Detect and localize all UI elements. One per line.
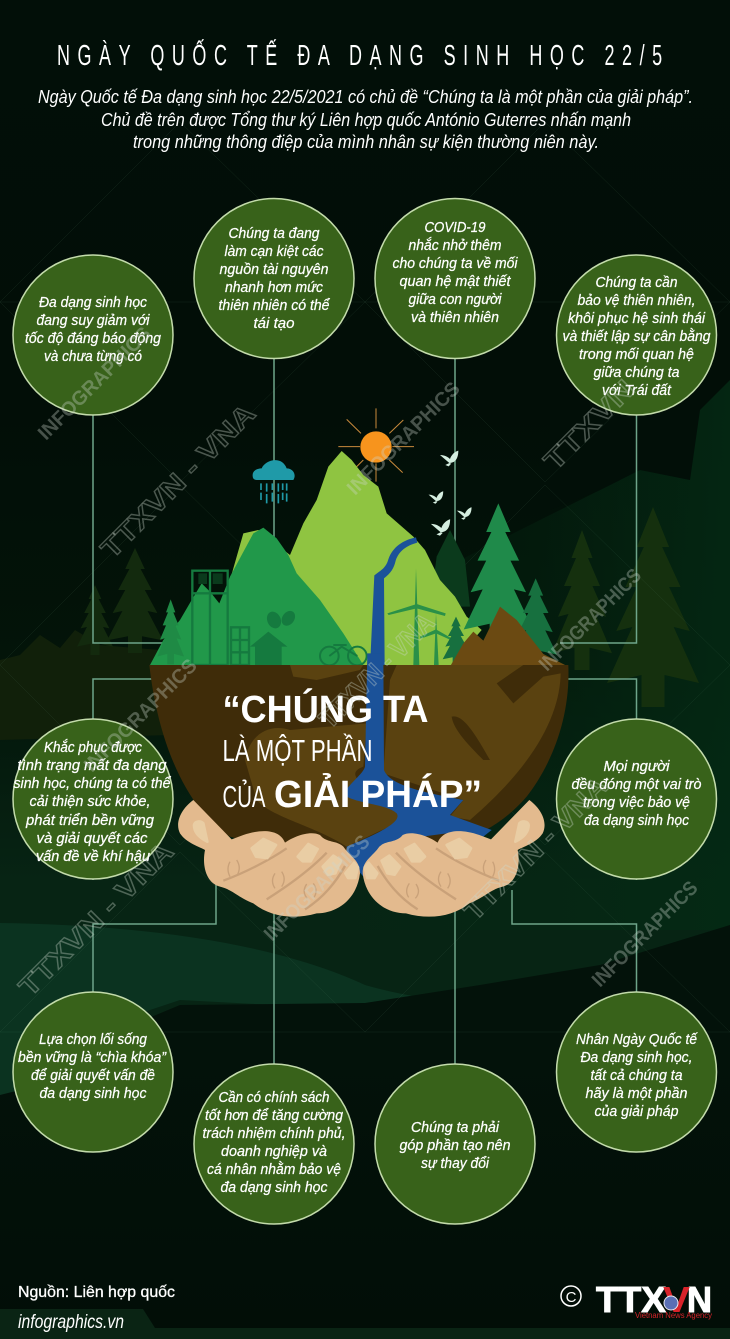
circle: thay đổi: [375, 1064, 535, 1224]
circle: tài nguyên: nhanh hơn mức: [225, 279, 323, 296]
circle: tài nguyên: làm cạn kiệt các: [224, 243, 324, 260]
icon: sun: [338, 408, 414, 482]
circle: COVID-19: nhắc nhở thêm: [408, 237, 502, 254]
distant trees: [430, 530, 470, 607]
connector lines: [93, 358, 636, 1064]
watermarks: TTXVN - VNA: [313, 607, 440, 734]
circle: khắc phục: Khắc phục được: [44, 739, 142, 756]
icon: wind turbines: [387, 568, 452, 665]
logo: TTXVN: TTX: [596, 1279, 666, 1320]
circle: bảo vệ thiên nhiên: với Trái đất: [602, 382, 672, 399]
circle: bảo vệ thiên nhiên: [556, 255, 716, 415]
circle: một phần của giải pháp: hãy là một phần: [586, 1085, 688, 1102]
watermarks: INFOGRAPHICS: [535, 565, 646, 676]
circle: khắc phục: [13, 719, 173, 879]
heading: GIẢI PHÁP”: [274, 772, 482, 816]
circle: khắc phục: sinh học, chúng ta có thể: [14, 775, 171, 792]
circle: COVID-19: giữa con người: [408, 291, 502, 308]
circle: COVID-19: quan hệ mật thiết: [400, 273, 511, 290]
circle: lối sống: [13, 992, 173, 1152]
circle: bảo vệ thiên nhiên: và thiết lập sự cân bằng: [562, 328, 711, 345]
circle: khắc phục: phát triển bền vững: [25, 812, 155, 829]
river: [343, 653, 492, 877]
circle: suy giảm: đang suy giảm với: [36, 312, 150, 329]
heading: [222, 687, 482, 816]
circle: suy giảm: và chưa từng có: [44, 348, 142, 365]
watermarks: INFOGRAPHICS: [34, 323, 156, 445]
circle: khắc phục: cải thiện sức khỏe,: [30, 793, 150, 810]
watermarks: TTXVN - VNA: [458, 771, 614, 926]
circle: mọi người: trong việc bảo vệ: [583, 794, 690, 811]
circle: khắc phục: và giải quyết các: [36, 830, 148, 847]
watermarks: TTXVN - VNA: [13, 836, 179, 1002]
circle: lối sống: bền vững là “chìa khóa”: [18, 1049, 167, 1066]
logo: TTXVN: [596, 1279, 712, 1320]
icon: rain cloud: [253, 460, 295, 503]
circle: lối sống: đa dạng sinh học: [40, 1085, 147, 1102]
circle: chính sách: đa dạng sinh học: [220, 1179, 328, 1196]
circle: mọi người: đều đóng một vai trò: [572, 776, 702, 793]
circle: suy giảm: tốc độ đáng báo động: [25, 330, 162, 347]
watermarks: INFOGRAPHICS: [260, 831, 375, 946]
watermarks: TTXVN: [538, 374, 641, 476]
brown mound: [450, 607, 568, 667]
central illustration: soil bowl and hands: [149, 653, 569, 917]
circle: một phần của giải pháp: Đa dạng sinh học,: [580, 1049, 692, 1066]
circle: COVID-19: [375, 198, 535, 358]
circle: tài nguyên: nguồn tài nguyên: [220, 261, 328, 278]
circle: thay đổi: Chúng ta phải: [411, 1119, 500, 1136]
small left tree: [157, 599, 184, 664]
circle: mọi người: Mọi người: [604, 758, 670, 775]
circle: bảo vệ thiên nhiên: giữa chúng ta: [594, 364, 680, 381]
buildings and house: [192, 571, 249, 667]
circle: mọi người: đa dạng sinh học: [584, 812, 689, 829]
circle: mọi người: [556, 719, 716, 879]
watermarks: INFOGRAPHICS: [343, 378, 465, 500]
circle: lối sống: để giải quyết vấn đề: [31, 1067, 155, 1084]
circle: một phần của giải pháp: của giải pháp: [594, 1103, 678, 1120]
circle: COVID-19: và thiên nhiên: [411, 309, 499, 326]
watermarks: TTXVN - VNA: [95, 398, 261, 564]
watermarks: INFOGRAPHICS: [588, 877, 703, 992]
circle: chính sách: [194, 1064, 354, 1224]
copyright symbol: C: [566, 1289, 577, 1306]
circle: khắc phục: vấn đề về khí hậu: [36, 848, 151, 865]
website: infographics.vn: [18, 1312, 124, 1333]
circle: COVID-19: COVID-19: [424, 219, 486, 236]
footer band: [0, 1309, 730, 1339]
circle: chính sách: doanh nghiệp và: [221, 1143, 327, 1160]
logo: TTXVN: N: [687, 1279, 712, 1320]
circle: thay đổi: sự thay đổi: [421, 1155, 490, 1172]
heading: LÀ MỘT PHẦN: [222, 733, 372, 768]
circle: tài nguyên: [194, 198, 354, 358]
watermarks: [13, 323, 703, 1002]
intro text: Chủ đề trên được Tổng thư ký Liên hợp quốc António Guterres nhấn mạnh: [101, 109, 631, 130]
soil bowl: [149, 665, 569, 857]
watermarks: INFOGRAPHICS: [80, 655, 202, 777]
circle: thay đổi: góp phần tạo nên: [400, 1137, 510, 1154]
circle: một phần của giải pháp: Nhân Ngày Quốc tế: [576, 1031, 699, 1048]
icon: left hand: [178, 800, 360, 917]
copyright symbol: [561, 1286, 581, 1306]
circle: bảo vệ thiên nhiên: khôi phục hệ sinh thái: [568, 310, 706, 327]
circle: suy giảm: Đa dạng sinh học: [39, 294, 147, 311]
circle: chính sách: Cần có chính sách: [218, 1089, 330, 1106]
circle: chính sách: cá nhân nhằm bảo vệ: [207, 1161, 341, 1178]
circle: COVID-19: cho chúng ta về mối: [392, 255, 518, 272]
big trees: [464, 503, 533, 647]
big light mountain: [230, 451, 482, 667]
green mountain: [150, 528, 363, 684]
circle: tài nguyên: tái tạo: [254, 315, 294, 332]
circle: bảo vệ thiên nhiên: bảo vệ thiên nhiên,: [578, 292, 696, 309]
circle: chính sách: trách nhiệm chính phủ,: [202, 1125, 346, 1142]
circle: một phần của giải pháp: [556, 992, 716, 1152]
intro text: [38, 86, 693, 152]
icon: bicycle: [320, 645, 367, 665]
logo: TTXVN: V: [663, 1279, 690, 1320]
circle: suy giảm: [13, 255, 173, 415]
logo: TTXVN: Vietnam News Agency: [635, 1311, 712, 1320]
circle: bảo vệ thiên nhiên: Chúng ta cần: [596, 274, 678, 291]
waterfall: [370, 537, 417, 667]
circle: lối sống: Lựa chọn lối sống: [39, 1031, 148, 1048]
circle: chính sách: tốt hơn để tăng cường: [205, 1107, 344, 1124]
circle: một phần của giải pháp: tất cả chúng ta: [590, 1067, 682, 1084]
central illustration: landscape: [150, 408, 568, 684]
circle: bảo vệ thiên nhiên: trong mối quan hệ: [579, 346, 694, 363]
circle: tài nguyên: Chúng ta đang: [228, 225, 320, 242]
heading: CỦA: [222, 778, 266, 814]
source: Nguồn: Liên hợp quốc: [18, 1284, 175, 1301]
icon: butterflies: [429, 451, 472, 536]
circle: tài nguyên: thiên nhiên có thể: [218, 297, 330, 314]
circle: khắc phục: tình trạng mất đa dạng: [18, 757, 167, 774]
icon: right hand: [363, 800, 545, 917]
heading: “CHÚNG TA: [222, 687, 428, 731]
title: NGÀY QUỐC TẾ ĐA DẠNG SINH HỌC 22/5: [57, 39, 662, 72]
intro text: trong những thông điệp của mình nhân sự kiện thường niên này.: [133, 131, 599, 152]
